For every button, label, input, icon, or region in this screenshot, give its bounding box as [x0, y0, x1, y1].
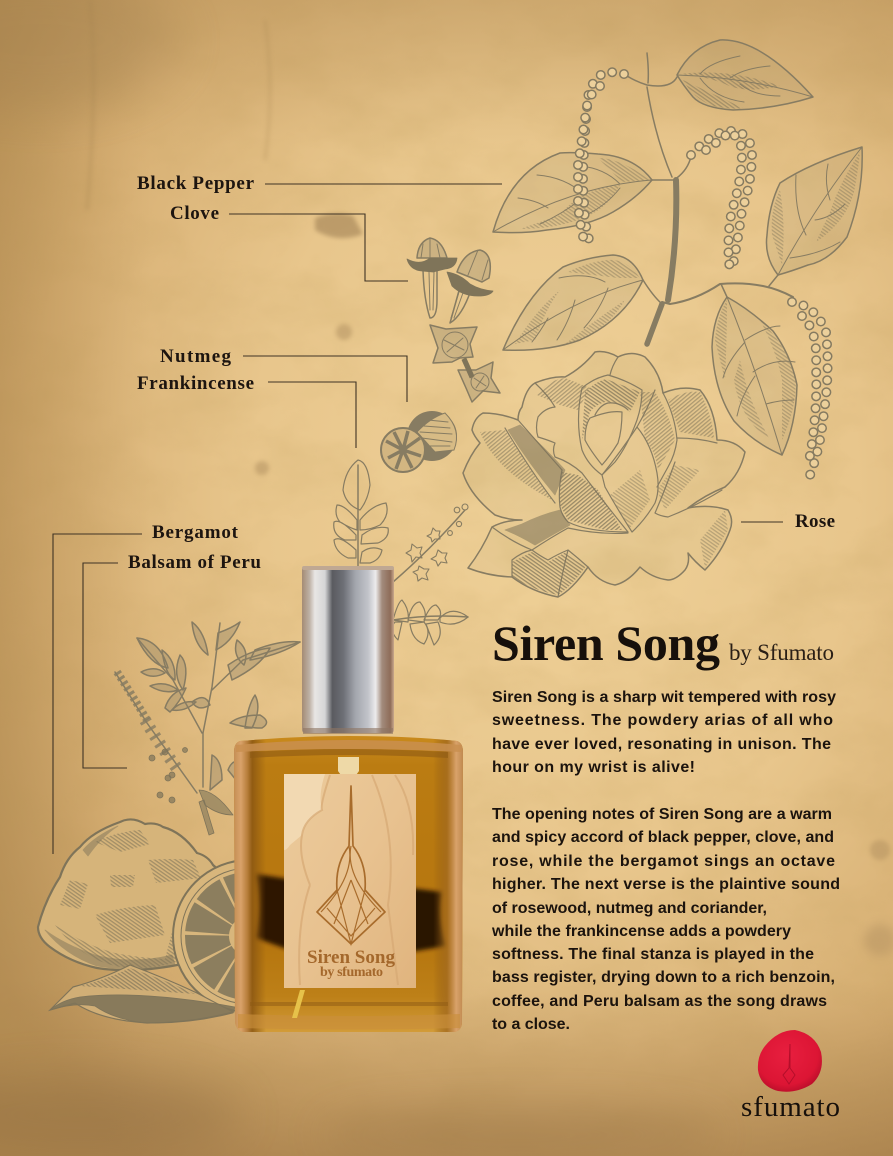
text block: intro: Siren Song is a sharp wit tempered with rosy — [492, 689, 836, 706]
title: Siren Song — [492, 615, 720, 671]
label: Bergamot: Bergamot — [152, 522, 239, 543]
sfumato logo: sfumato — [741, 1091, 840, 1123]
sfumato logo — [741, 1030, 840, 1123]
text block: notes description: bass register, drying down to a rich benzoin, — [492, 969, 835, 986]
rose hatching — [480, 378, 728, 595]
title: by Sfumato — [729, 640, 834, 665]
illustration: rose — [463, 352, 745, 597]
label: Rose: Rose — [795, 511, 835, 532]
pepper chains — [578, 72, 828, 480]
stems — [627, 53, 793, 344]
label text: Siren Song — [307, 947, 396, 968]
bottle cap — [302, 566, 394, 734]
callout labels — [53, 173, 835, 854]
label: Frankincense — [137, 373, 356, 448]
label: Balsam of Peru — [83, 552, 261, 768]
text block: notes description — [491, 806, 840, 1033]
label: Bergamot — [53, 522, 239, 854]
bottle body — [234, 736, 463, 1032]
leaves — [493, 40, 862, 455]
citrus slice — [173, 860, 325, 1012]
label: Nutmeg: Nutmeg — [160, 346, 232, 367]
label: Rose — [741, 511, 835, 532]
wood label — [284, 774, 416, 988]
text block: notes description: The opening notes of Siren Song are a warm — [492, 806, 832, 823]
text block: notes description: of rosewood, nutmeg and coriander, — [492, 900, 767, 917]
illustration: nutmeg — [381, 411, 457, 472]
text block: notes description: higher. The next verse is the plaintive sound — [492, 876, 840, 893]
label: Frankincense: Frankincense — [137, 373, 254, 394]
text block: notes description: softness. The final stanza is played in the — [492, 946, 814, 963]
illustration: black pepper plant — [493, 40, 862, 480]
text block: notes description: and spicy accord of black pepper, clove, and — [492, 829, 834, 846]
text block: intro: hour on my wrist is alive! — [492, 759, 695, 776]
label: Clove: Clove — [170, 203, 219, 224]
text block: notes description: coffee, and Peru balsam as the song draws — [492, 993, 827, 1010]
title — [492, 615, 834, 671]
rose petals — [492, 357, 722, 597]
icon: red wax seal — [758, 1030, 822, 1092]
text block: notes description: to a close. — [492, 1016, 570, 1033]
text block: intro: sweetness. The powdery arias of all who — [492, 712, 833, 729]
label: Clove — [170, 203, 408, 281]
label: Black Pepper: Black Pepper — [137, 173, 255, 194]
illustration: bergamot fruit and leaf — [38, 819, 325, 1023]
text block: intro: have ever loved, resonating in unison. The — [492, 736, 831, 753]
leaf — [50, 965, 233, 1023]
label: Nutmeg — [160, 346, 407, 402]
text block: intro — [492, 689, 836, 776]
text block: notes description: while the frankincense adds a powdery — [491, 923, 791, 940]
text block: notes description: rose, while the bergamot sings an octave — [492, 853, 835, 870]
perfume bottle — [234, 566, 463, 1032]
illustration: balsam branch — [115, 622, 300, 835]
illustration: cloves — [407, 238, 500, 402]
label: Balsam of Peru: Balsam of Peru — [128, 552, 261, 573]
wood label: by sfumato — [320, 965, 383, 980]
illustration: frankincense sprig — [334, 460, 468, 645]
rose outline — [463, 352, 745, 597]
